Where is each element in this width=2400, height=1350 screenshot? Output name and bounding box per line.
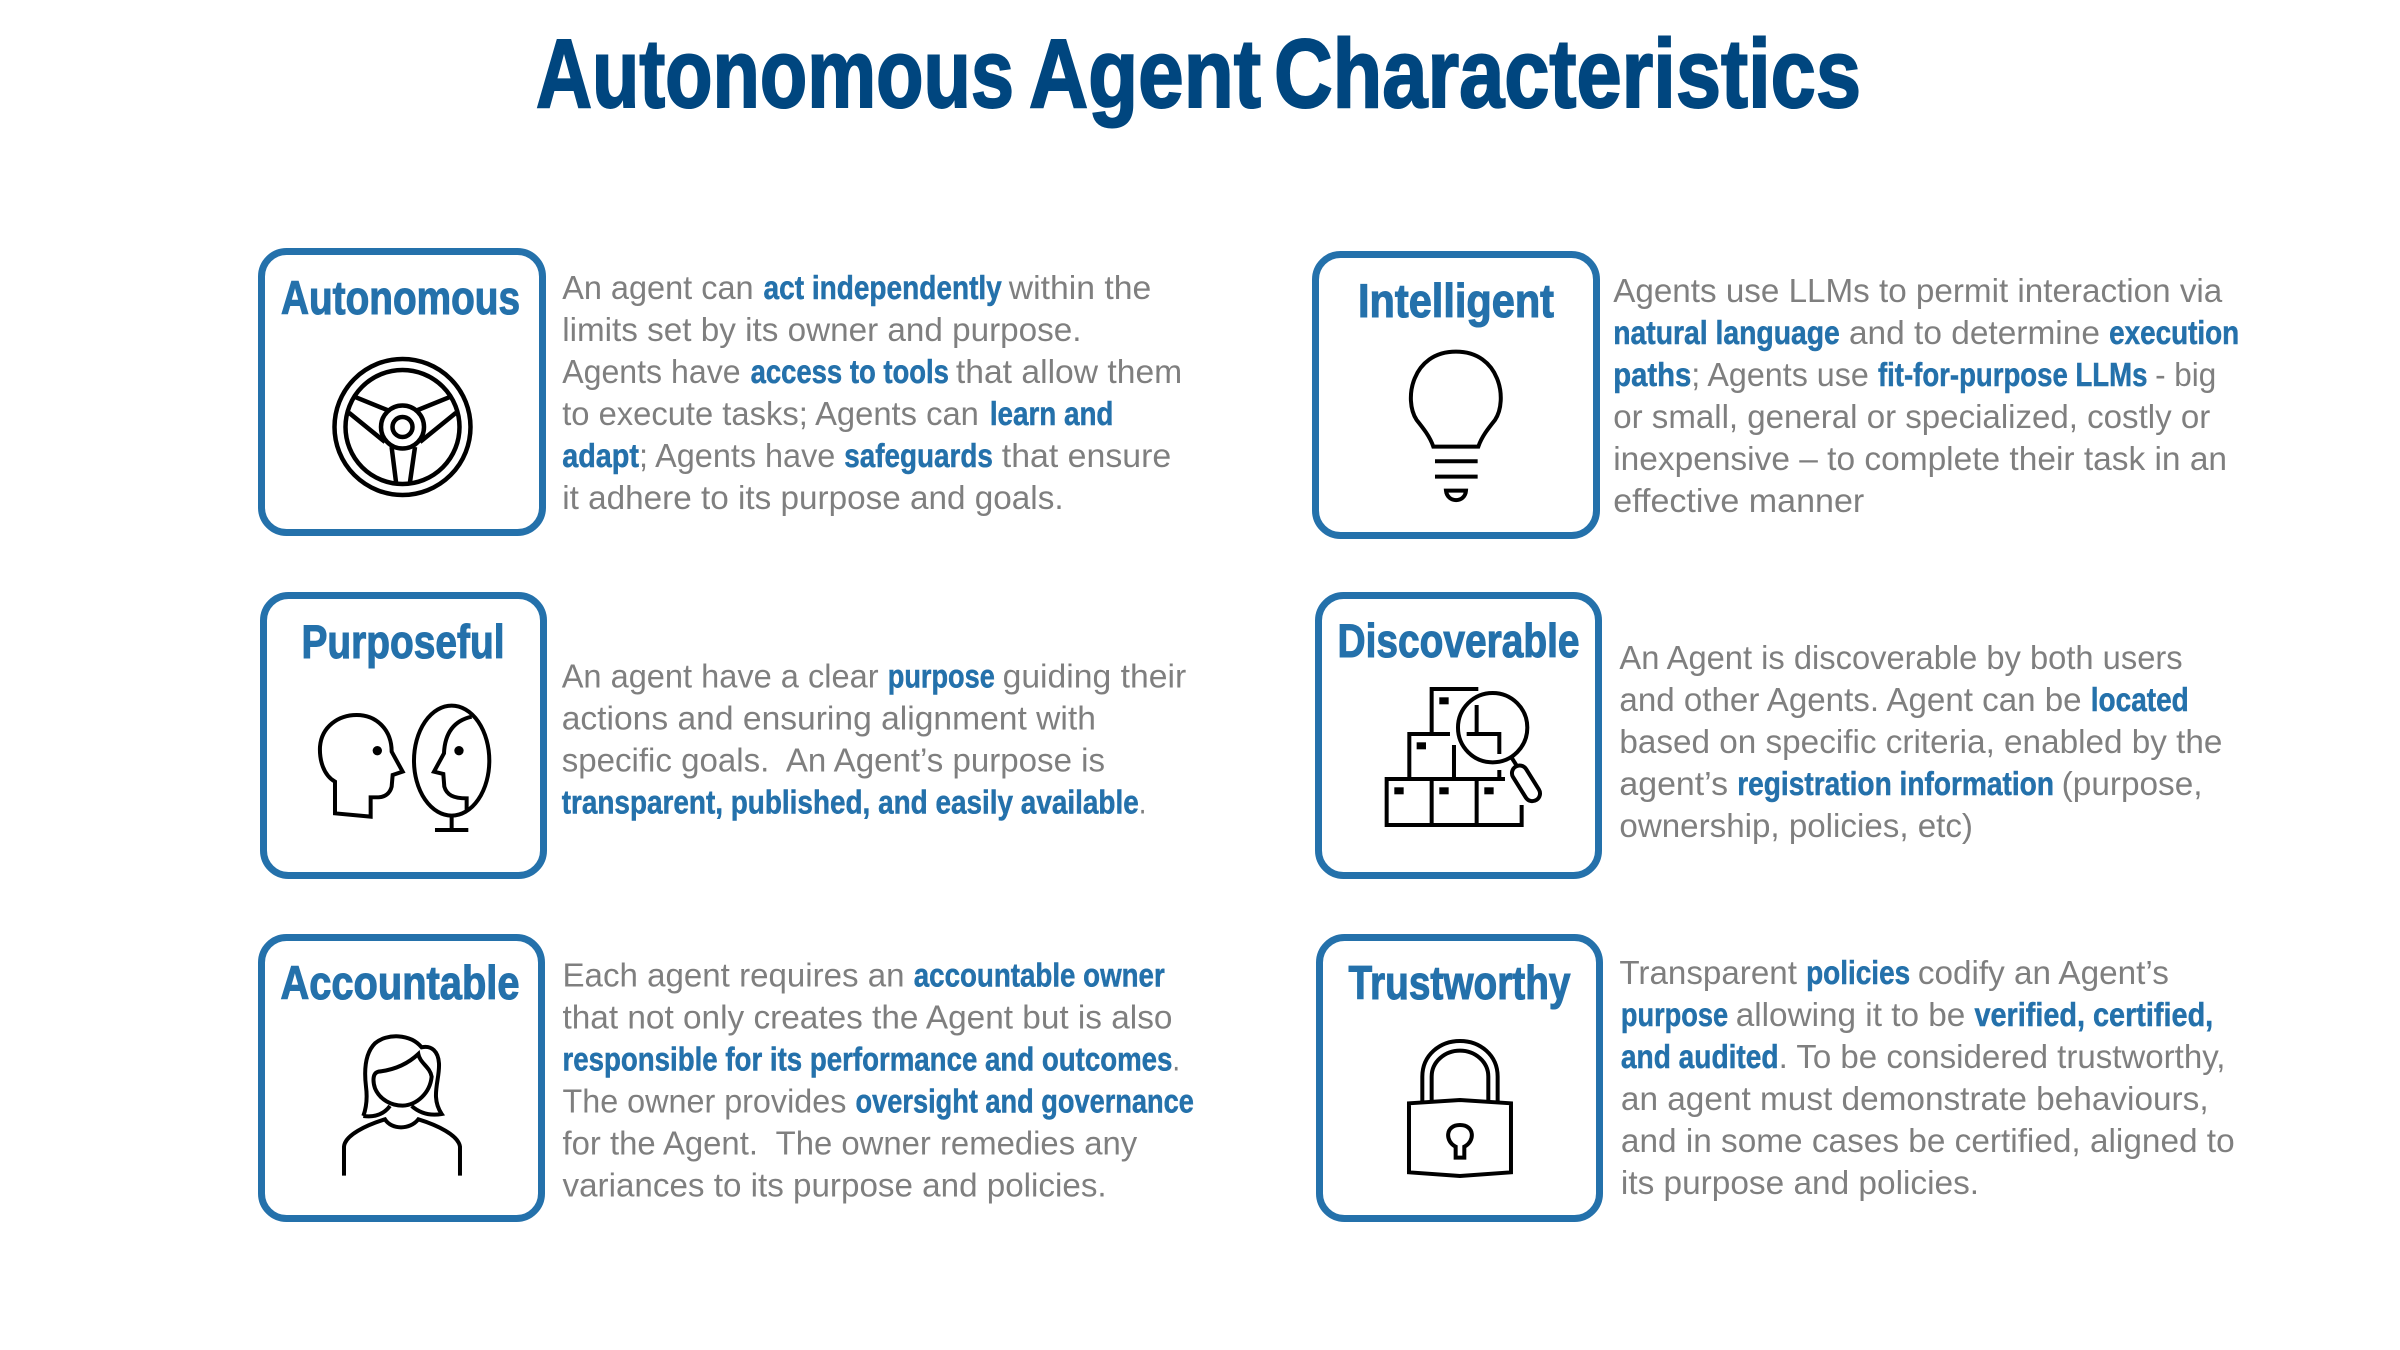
description: autonomous: limits set by its owner and purpose. xyxy=(562,311,1082,348)
description: intelligent: and to determine xyxy=(1849,314,2100,351)
panel: trustworthy xyxy=(1320,938,2235,1218)
description: autonomous: act independently xyxy=(764,269,1002,306)
title xyxy=(536,19,1861,128)
description: autonomous: ; Agents have xyxy=(639,437,835,474)
description: trustworthy: its purpose and policies. xyxy=(1621,1164,1979,1201)
description: accountable: that not only creates the Agent but is also xyxy=(562,998,1172,1036)
heading: trustworthy: Trustworthy xyxy=(1348,956,1570,1009)
description: intelligent: effective manner xyxy=(1613,482,1864,519)
panel: purposeful xyxy=(264,596,1186,876)
description: discoverable: and other Agents. Agent can be xyxy=(1619,681,2082,718)
panel: autonomous xyxy=(262,252,1182,532)
description: purposeful: transparent, published, and easily available xyxy=(562,783,1139,821)
title: Agent xyxy=(1029,19,1261,128)
title: Autonomous xyxy=(536,19,1014,128)
description: purposeful: An agent have a clear xyxy=(562,657,879,695)
icon: padlock xyxy=(1409,1041,1511,1176)
description: accountable: . xyxy=(1172,1040,1180,1078)
description: intelligent: natural language xyxy=(1613,314,1840,351)
heading: intelligent: Intelligent xyxy=(1358,274,1554,327)
description: autonomous xyxy=(562,269,1182,516)
description: autonomous: adapt xyxy=(562,437,639,474)
description: autonomous: safeguards xyxy=(844,437,993,474)
description: intelligent: or small, general or specialized, costly or xyxy=(1613,398,2210,435)
description: intelligent: inexpensive – to complete their task in an xyxy=(1613,440,2227,477)
icon: steering wheel xyxy=(334,359,470,495)
description: intelligent: execution xyxy=(2109,314,2239,351)
description: accountable: Each agent requires an xyxy=(562,956,905,994)
description: accountable: oversight and governance xyxy=(856,1082,1194,1120)
description: purposeful: actions and ensuring alignment with xyxy=(562,699,1096,737)
description: trustworthy: Transparent xyxy=(1619,954,1797,991)
heading: accountable: Accountable xyxy=(280,956,520,1009)
description: intelligent: fit-for-purpose LLMs xyxy=(1878,356,2147,393)
description: discoverable: (purpose, xyxy=(2062,765,2203,802)
description: discoverable: based on specific criteria, enabled by the xyxy=(1619,723,2222,760)
description: autonomous: Agents have xyxy=(562,353,741,390)
description: accountable: for the Agent. The owner remedies any xyxy=(562,1124,1138,1162)
panel: discoverable xyxy=(1318,596,2222,876)
title: Characteristics xyxy=(1274,19,1861,128)
description: autonomous: that ensure xyxy=(1002,437,1171,474)
heading: purposeful: Purposeful xyxy=(302,615,504,668)
box: purposeful xyxy=(264,596,544,876)
description: purposeful xyxy=(562,657,1186,821)
description: autonomous: to execute tasks; Agents can xyxy=(562,395,979,432)
description: autonomous: within the xyxy=(1008,269,1151,306)
description: intelligent: paths xyxy=(1613,356,1691,393)
description: trustworthy: purpose xyxy=(1621,996,1728,1033)
description: autonomous: learn and xyxy=(990,395,1113,432)
description: purposeful: purpose xyxy=(888,657,995,695)
description: trustworthy: and audited xyxy=(1621,1038,1779,1075)
description: trustworthy: codify an Agent’s xyxy=(1918,954,2169,991)
description: purposeful: . xyxy=(1139,783,1146,821)
box: accountable xyxy=(262,938,542,1218)
description: intelligent: - big xyxy=(2155,356,2216,393)
description: intelligent xyxy=(1613,272,2239,519)
description: trustworthy: an agent must demonstrate behaviours, xyxy=(1621,1080,2209,1117)
icon: person xyxy=(344,1036,460,1176)
description: discoverable: registration information xyxy=(1737,765,2054,802)
description: accountable: responsible for its performance and outcomes xyxy=(562,1040,1172,1078)
description: accountable: variances to its purpose and policies. xyxy=(562,1166,1107,1204)
description: trustworthy: allowing it to be xyxy=(1736,996,1965,1033)
description: purposeful: specific goals. An Agent’s purpose is xyxy=(562,741,1105,779)
description: discoverable xyxy=(1619,639,2222,844)
description: autonomous: that allow them xyxy=(956,353,1182,390)
description: autonomous: An agent can xyxy=(562,269,754,306)
description: discoverable: located xyxy=(2091,681,2189,718)
heading: discoverable: Discoverable xyxy=(1338,614,1580,667)
description: accountable xyxy=(562,956,1194,1204)
description: accountable: accountable owner xyxy=(914,956,1165,994)
description: trustworthy: . To be considered trustworthy, xyxy=(1779,1038,2225,1075)
icon: boxes with magnifier xyxy=(1387,689,1543,825)
icon: light bulb xyxy=(1411,352,1501,500)
description: intelligent: Agents use LLMs to permit interaction via xyxy=(1613,272,2223,309)
description: purposeful: guiding their xyxy=(1003,657,1186,695)
panel: accountable xyxy=(262,938,1194,1218)
description: autonomous: access to tools xyxy=(751,353,949,390)
description: accountable: The owner provides xyxy=(562,1082,846,1120)
description: trustworthy: verified, certified, xyxy=(1974,996,2213,1033)
box: trustworthy xyxy=(1320,938,1600,1218)
heading: autonomous: Autonomous xyxy=(281,271,520,324)
description: discoverable: ownership, policies, etc) xyxy=(1619,807,1973,844)
description: discoverable: agent’s xyxy=(1619,765,1728,802)
box: intelligent xyxy=(1316,254,1596,536)
description: intelligent: ; Agents use xyxy=(1691,356,1869,393)
icon: head facing mirror xyxy=(320,706,489,830)
description: trustworthy xyxy=(1619,954,2235,1201)
box: autonomous xyxy=(262,252,542,532)
box: discoverable xyxy=(1318,596,1598,876)
panel: intelligent xyxy=(1316,254,2239,536)
description: discoverable: An Agent is discoverable by both users xyxy=(1619,639,2183,676)
description: trustworthy: and in some cases be certified, aligned to xyxy=(1621,1122,2235,1159)
description: autonomous: it adhere to its purpose and goals. xyxy=(562,479,1064,516)
description: trustworthy: policies xyxy=(1806,954,1910,991)
